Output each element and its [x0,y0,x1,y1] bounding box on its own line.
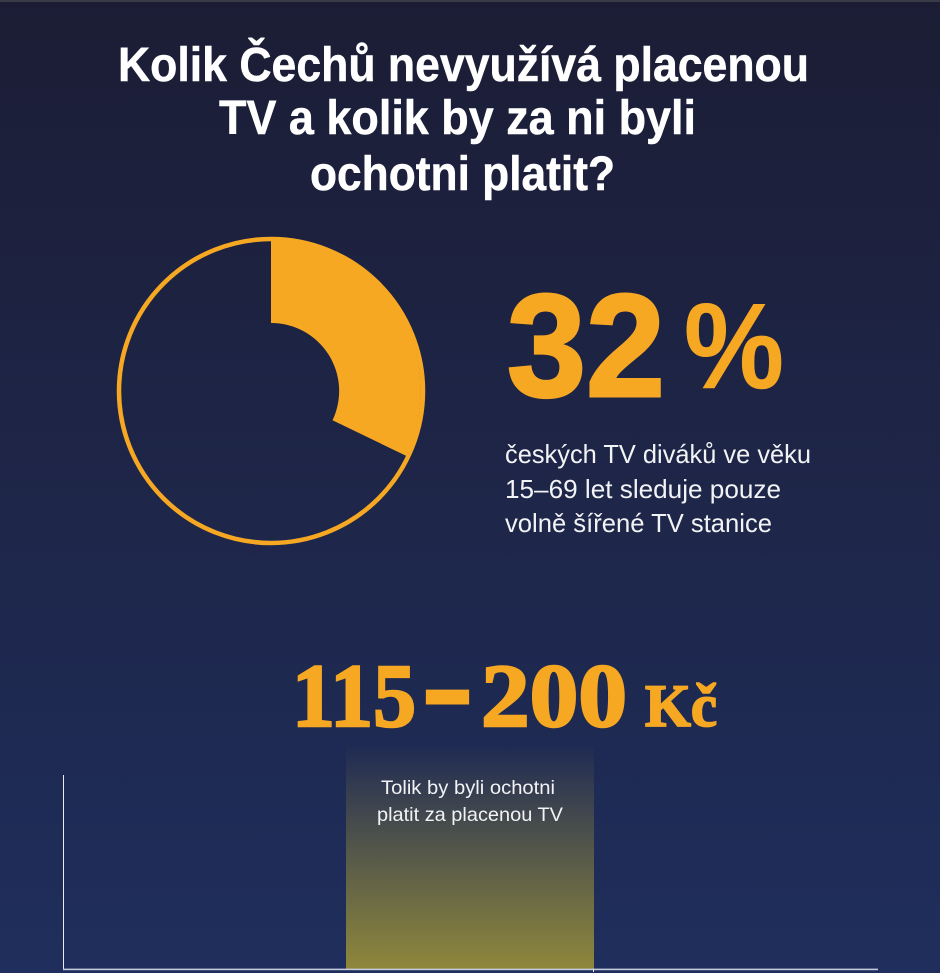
donut chart: 32 % [119,237,423,543]
big number: 32 % [507,264,784,427]
big number: 32 %: % [684,278,784,414]
title [118,37,809,201]
band label: platit za placenou TV [377,804,563,826]
price range: Kč [645,673,717,739]
price range [292,647,717,746]
title: TV a kolik by za ni byli [219,92,696,145]
price range: 115 [292,647,416,746]
title: ochotni platit? [310,148,615,201]
band label: Tolik by byli ochotni [381,777,555,799]
price range: — [426,656,469,729]
description text: 15–69 let sleduje pouze [505,474,781,504]
description text: českých TV diváků ve věku [505,439,811,469]
description text: volně šířené TV stanice [505,508,772,538]
y axis [63,775,64,970]
description text [505,439,811,538]
x axis [63,969,878,970]
axis tick [593,969,594,972]
band label [377,777,563,826]
price range: 200 [481,647,627,746]
big number: 32 %: 32 [507,264,665,427]
title: Kolik Čechů nevyužívá placenou [118,37,809,92]
top edge strip [0,0,940,2]
range band [346,745,594,969]
chart: price range band with axes [63,745,878,972]
